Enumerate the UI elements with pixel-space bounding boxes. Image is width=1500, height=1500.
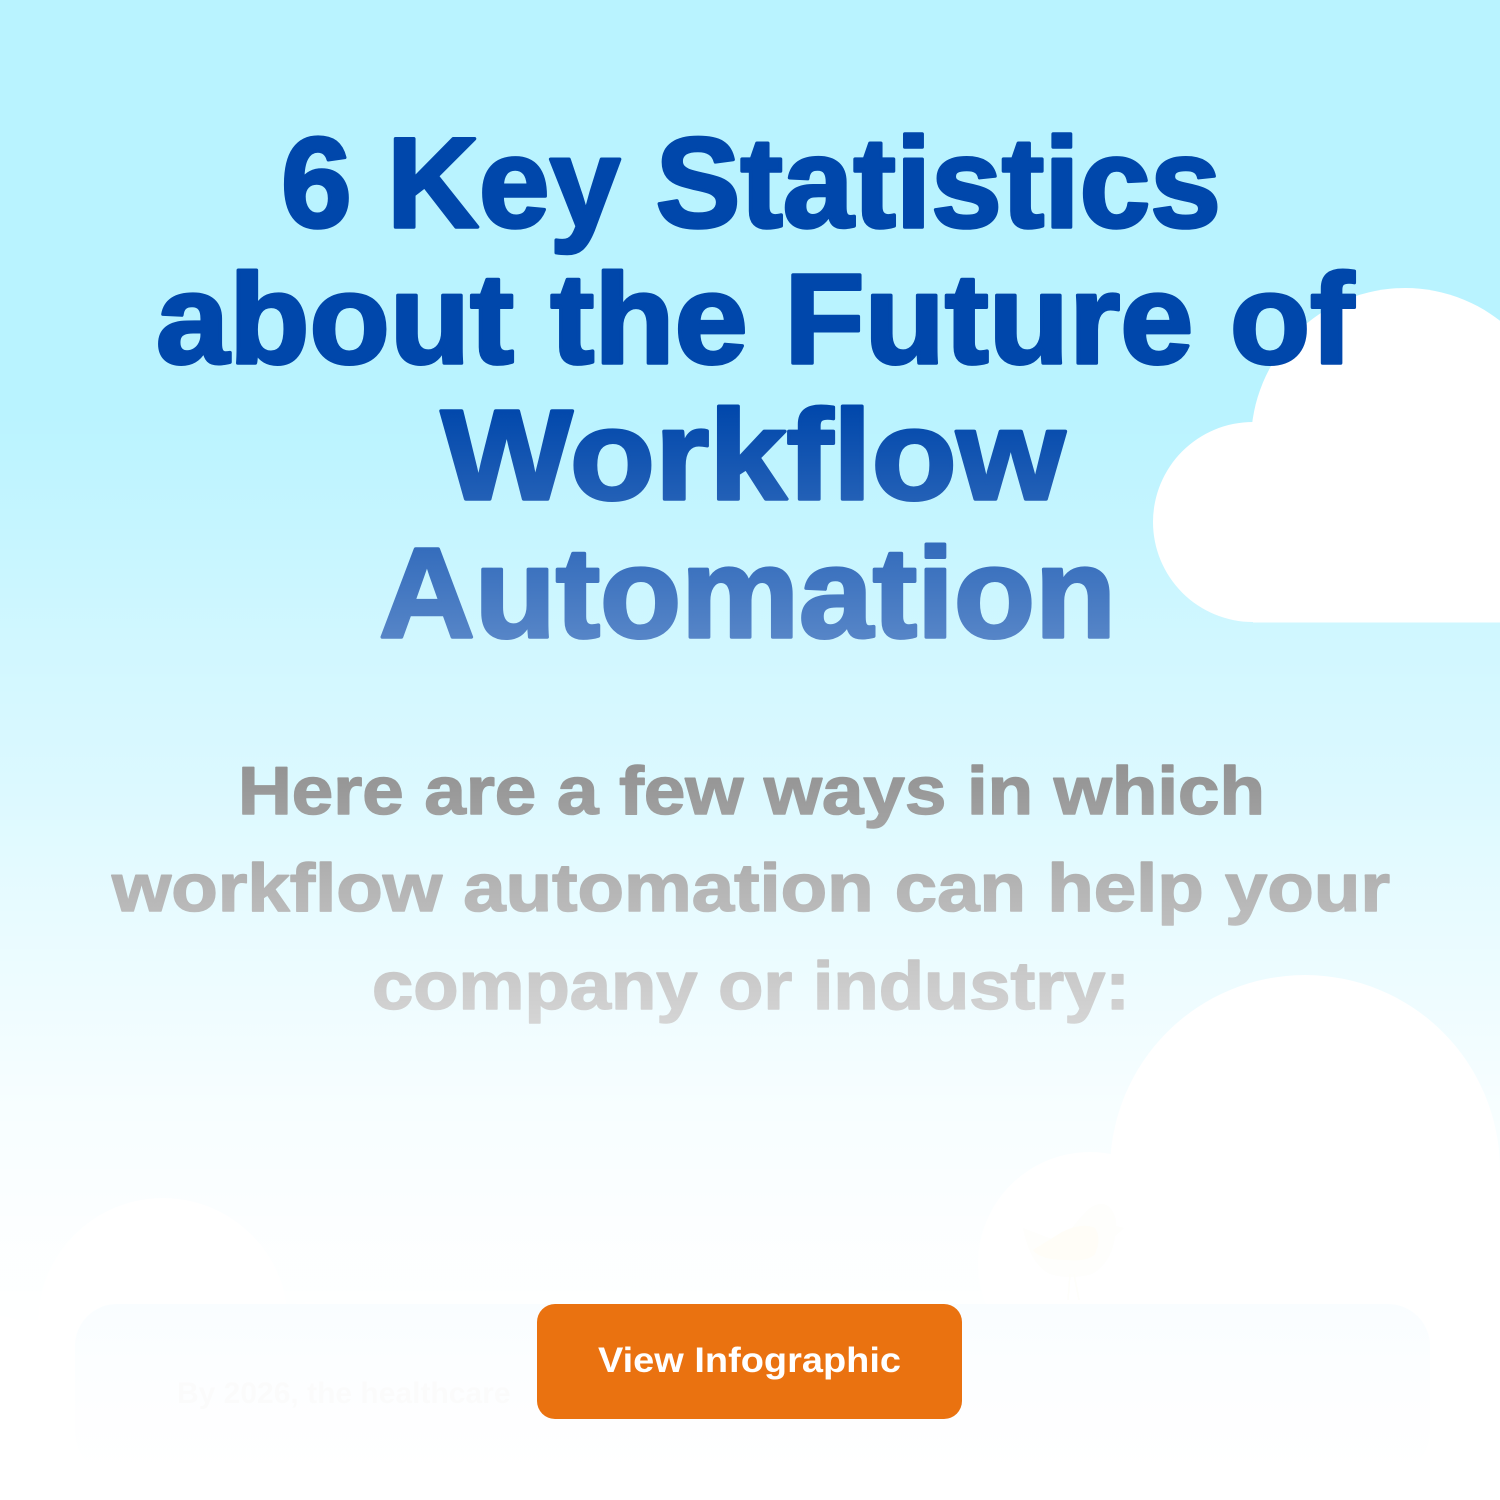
subtitle: Here are a few ways in which [238, 753, 1265, 829]
title [156, 112, 1354, 665]
button: View Infographic [537, 1304, 962, 1419]
cloud: lower right [978, 975, 1500, 1500]
panel: faded statistic card [75, 1304, 1430, 1474]
title: about the Future of [156, 248, 1354, 391]
cloud: upper right [1153, 288, 1500, 622]
title: 6 Key Statistics [281, 112, 1221, 255]
faded statistic text: By 2026, the healthcare [177, 1377, 511, 1410]
button: View Infographic: View Infographic [598, 1341, 901, 1380]
cloud: lower left [0, 1198, 400, 1500]
title: Workflow [441, 384, 1065, 527]
icon: faded bird [1023, 1204, 1124, 1300]
subtitle [111, 753, 1390, 1024]
subtitle: company or industry: [372, 948, 1130, 1024]
subtitle: workflow automation can help your [111, 850, 1390, 926]
title: Automation [379, 522, 1116, 665]
